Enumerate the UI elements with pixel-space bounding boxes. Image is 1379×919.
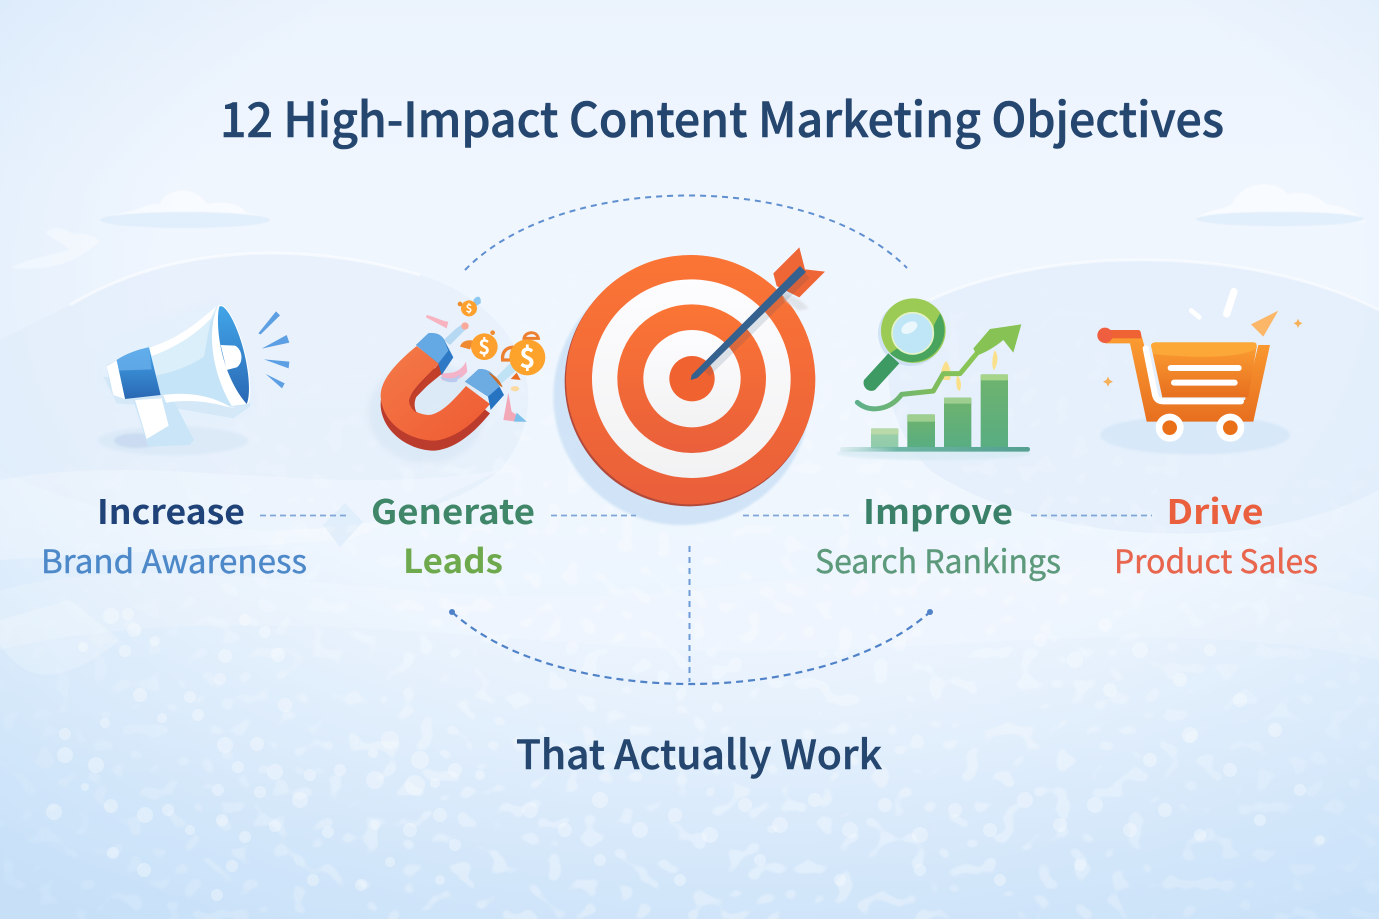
magnet body [381,355,490,451]
icon: target with arrow [553,247,825,525]
label: improve search rankings [815,485,1061,583]
icon: shopping cart [1097,287,1302,454]
label: drive product sales [1114,485,1318,583]
confetti speckles [46,608,1325,901]
disc edge [565,256,815,506]
icon: megaphone [93,300,289,455]
growth arrow [857,324,1021,409]
label: generate leads [371,485,535,583]
label: improve search rankings: Improve [863,485,1013,534]
dashed arc: bottom [449,609,933,684]
label: drive product sales: Drive [1166,485,1264,534]
label: generate leads: Generate [371,485,535,534]
bars [840,374,1030,452]
magnifier [864,298,946,391]
label: increase brand awareness: Increase [97,485,245,534]
icon: magnifier and growth chart [837,298,1030,460]
label: drive product sales: Product Sales [1114,537,1318,583]
coins: $ [478,331,490,360]
arrow [691,247,825,380]
coins: $ [519,335,535,375]
dashed arc: top [465,195,907,270]
sparks and particles [426,297,527,422]
dashed connector: centre to bottom [688,546,690,682]
clouds [10,184,1366,269]
coins: $ [466,301,472,317]
label: improve search rankings: Search Rankings [815,537,1061,583]
disc rings [566,255,815,504]
coins [458,300,545,380]
label: increase brand awareness [41,485,307,583]
label: generate leads: Leads [403,535,503,583]
title: 12 High-Impact Content Marketing Objectives [220,81,1224,151]
subtitle: That Actually Work [516,723,882,781]
label: increase brand awareness: Brand Awareness [41,537,307,583]
icon: magnet with coins [368,297,545,463]
dashed connectors between labels [260,514,1152,516]
